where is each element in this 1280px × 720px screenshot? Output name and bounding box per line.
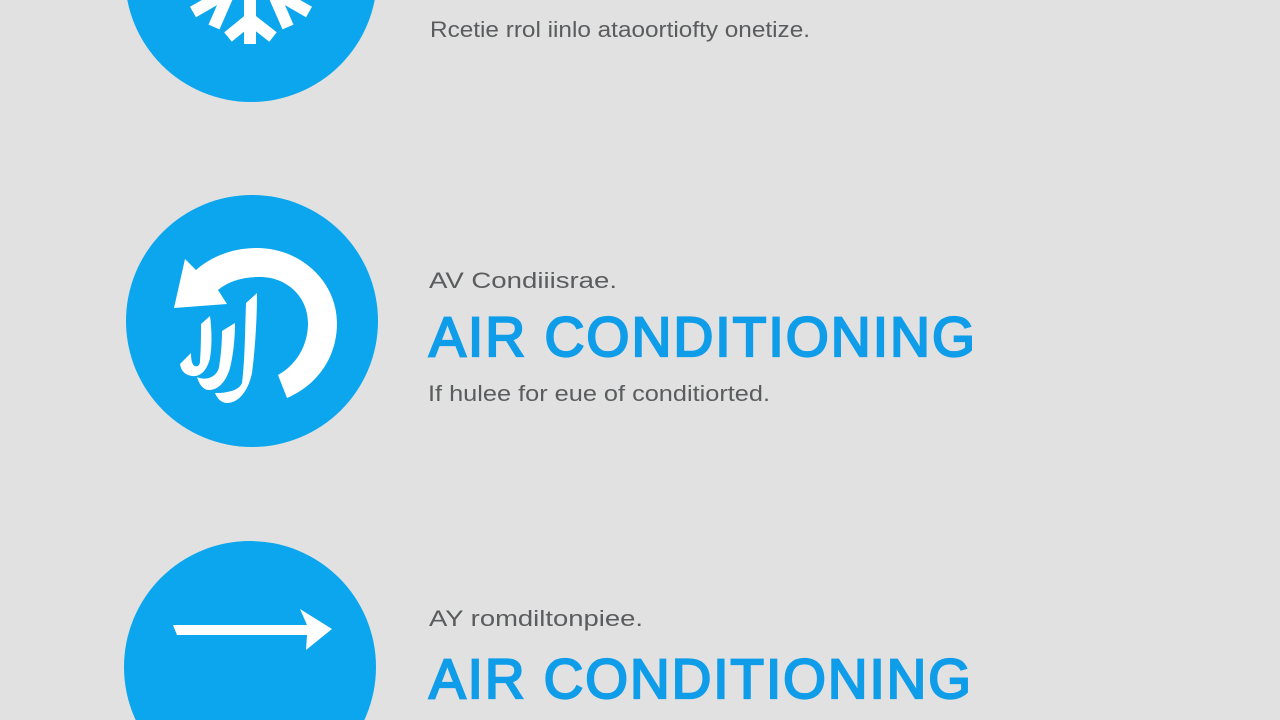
heading: air conditioning (bottom): AIR CONDITIONING: [429, 647, 973, 710]
text: top item description: Rcetie rrol iinlo ataoortiofty onetize.: [430, 17, 810, 42]
icon part: air streams: [180, 316, 212, 376]
text: middle item intro: AV Condiiisrae.: [429, 268, 617, 293]
icon part: curved arrow: [174, 248, 337, 398]
icon: circular arrow with air streams: [126, 195, 378, 447]
icon: right arrow in blue circle: [124, 541, 376, 720]
panel: top item (cooling): [125, 0, 810, 102]
heading: air conditioning: AIR CONDITIONING: [429, 305, 977, 368]
text: middle item description: If hulee for eue of conditiorted.: [428, 381, 770, 406]
panel: bottom item: [124, 541, 973, 720]
text: bottom item intro: AY romdiltonpiee.: [429, 606, 643, 631]
panel: middle item (air conditioning): [126, 195, 977, 447]
icon: snowflake in blue circle: [125, 0, 377, 102]
